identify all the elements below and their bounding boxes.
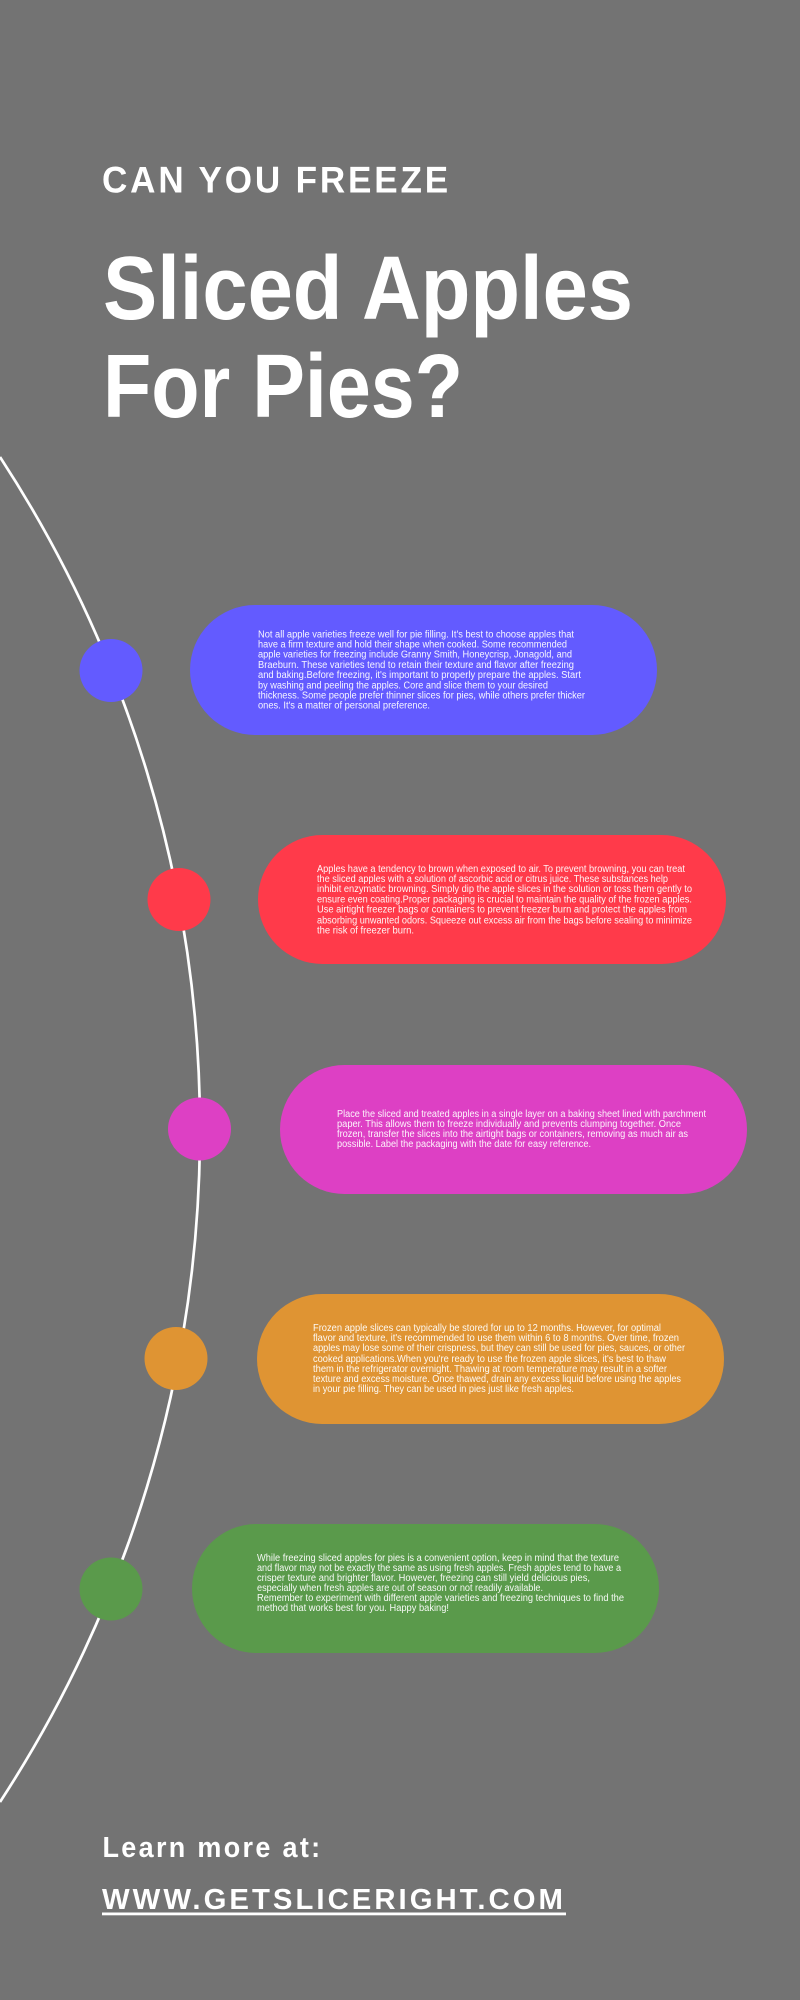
text block 4 [313, 1323, 686, 1395]
footer url: WWW.GETSLICERIGHT.COM [102, 1884, 566, 1916]
text block 3: frozen, transfer the slices into the airtight bags or containers, removing as much air as [337, 1129, 688, 1140]
text block 4: in your pie filling. They can be used in pies just like fresh apples. [313, 1384, 574, 1395]
text block 4: them in the refrigerator overnight. Thawing at room temperature may result in a softer [313, 1364, 668, 1375]
text block 2: Use airtight freezer bags or containers to prevent freezer burn and protect the apples from [317, 904, 687, 915]
step 2: browning and packaging [148, 835, 726, 964]
text block 5: and flavor may not be exactly the same as using fresh apples. Fresh apples tend to have a [257, 1563, 622, 1574]
text block 2: the risk of freezer burn. [317, 925, 414, 936]
pill 1 [190, 605, 657, 735]
text block 4: texture and excess moisture. Once thawed, drain any excess liquid before using the apples [313, 1374, 681, 1385]
text block 2: inhibit enzymatic browning. Simply dip the apple slices in the solution or toss them gently to [317, 884, 693, 895]
text block 3 [337, 1109, 706, 1150]
text block 1: by washing and peeling the apples. Core and slice them to your desired [258, 680, 548, 691]
title kicker: CAN YOU FREEZE [102, 160, 451, 200]
marker circle 3 [168, 1098, 231, 1160]
url underline [102, 1912, 566, 1915]
text block 1: have a firm texture and hold their shape when cooked. Some recommended [258, 639, 567, 650]
marker circle 4 [144, 1327, 208, 1390]
timeline arc [0, 457, 200, 1802]
text block 3: possible. Label the packaging with the date for easy reference. [337, 1139, 591, 1150]
pill 3 [280, 1065, 747, 1194]
title [102, 160, 633, 437]
marker circle 5 [80, 1558, 142, 1620]
text block 5 [257, 1553, 625, 1614]
text block 1: apple varieties for freezing include Granny Smith, Honeycrisp, Jonagold, and [258, 649, 572, 660]
text block 5: method that works best for you. Happy baking! [257, 1603, 449, 1614]
text block 1: Braeburn. These varieties tend to retain their texture and flavor after freezing [258, 660, 574, 671]
text block 1: Not all apple varieties freeze well for pie filling. It's best to choose apples that [258, 629, 574, 640]
marker circle 1 [80, 639, 142, 702]
step 4: storage and thawing [144, 1294, 724, 1424]
text block 4: Frozen apple slices can typically be stored for up to 12 months. However, for optimal [313, 1323, 661, 1334]
text block 1: thickness. Some people prefer thinner slices for pies, while others prefer thicker [258, 690, 586, 701]
pill 4 [257, 1294, 724, 1424]
text block 3: paper. This allows them to freeze individually and prevents clumping together. Once [337, 1119, 682, 1130]
pill 2 [258, 835, 726, 964]
text block 4: cooked applications.When you're ready to use the frozen apple slices, it's best to thaw [313, 1354, 667, 1365]
footer label: Learn more at: [102, 1832, 322, 1864]
text block 2: Apples have a tendency to brown when exposed to air. To prevent browning, you can treat [317, 864, 685, 875]
text block 5: especially when fresh apples are out of season or not readily available. [257, 1583, 543, 1594]
title main line 2: For Pies? [103, 337, 463, 437]
step 1: varieties and preparation [80, 605, 657, 735]
footer call to action [102, 1832, 566, 1916]
text block 1: ones. It's a matter of personal preference. [258, 700, 430, 711]
text block 5: Remember to experiment with different apple varieties and freezing techniques to find the [257, 1593, 625, 1604]
text block 1: and baking.Before freezing, it's important to properly prepare the apples. Start [258, 670, 581, 681]
text block 2 [317, 864, 693, 936]
text block 1 [258, 629, 586, 711]
text block 5: While freezing sliced apples for pies is a convenient option, keep in mind that the texture [257, 1553, 620, 1564]
text block 2: absorbing unwanted odors. Squeeze out excess air from the bags before sealing to minimize [317, 915, 693, 926]
pill 5 [192, 1524, 659, 1653]
text block 5: crisper texture and brighter flavor. However, freezing can still yield delicious pies, [257, 1573, 590, 1584]
text block 3: Place the sliced and treated apples in a single layer on a baking sheet lined with parchment [337, 1109, 706, 1120]
text block 4: apples may lose some of their crispness, but they can still be used for pies, sauces, or other [313, 1343, 686, 1354]
step 5: closing note [80, 1524, 659, 1653]
title main line 1: Sliced Apples [103, 239, 633, 339]
text block 4: flavor and texture, it's recommended to use them within 6 to 8 months. Over time, frozen [313, 1333, 679, 1344]
text block 2: ensure even coating.Proper packaging is crucial to maintain the quality of the frozen apples. [317, 894, 692, 905]
text block 2: the sliced apples with a solution of ascorbic acid or citrus juice. These substances help [317, 874, 669, 885]
marker circle 2 [148, 868, 210, 931]
step 3: freezing on a sheet [168, 1065, 747, 1194]
